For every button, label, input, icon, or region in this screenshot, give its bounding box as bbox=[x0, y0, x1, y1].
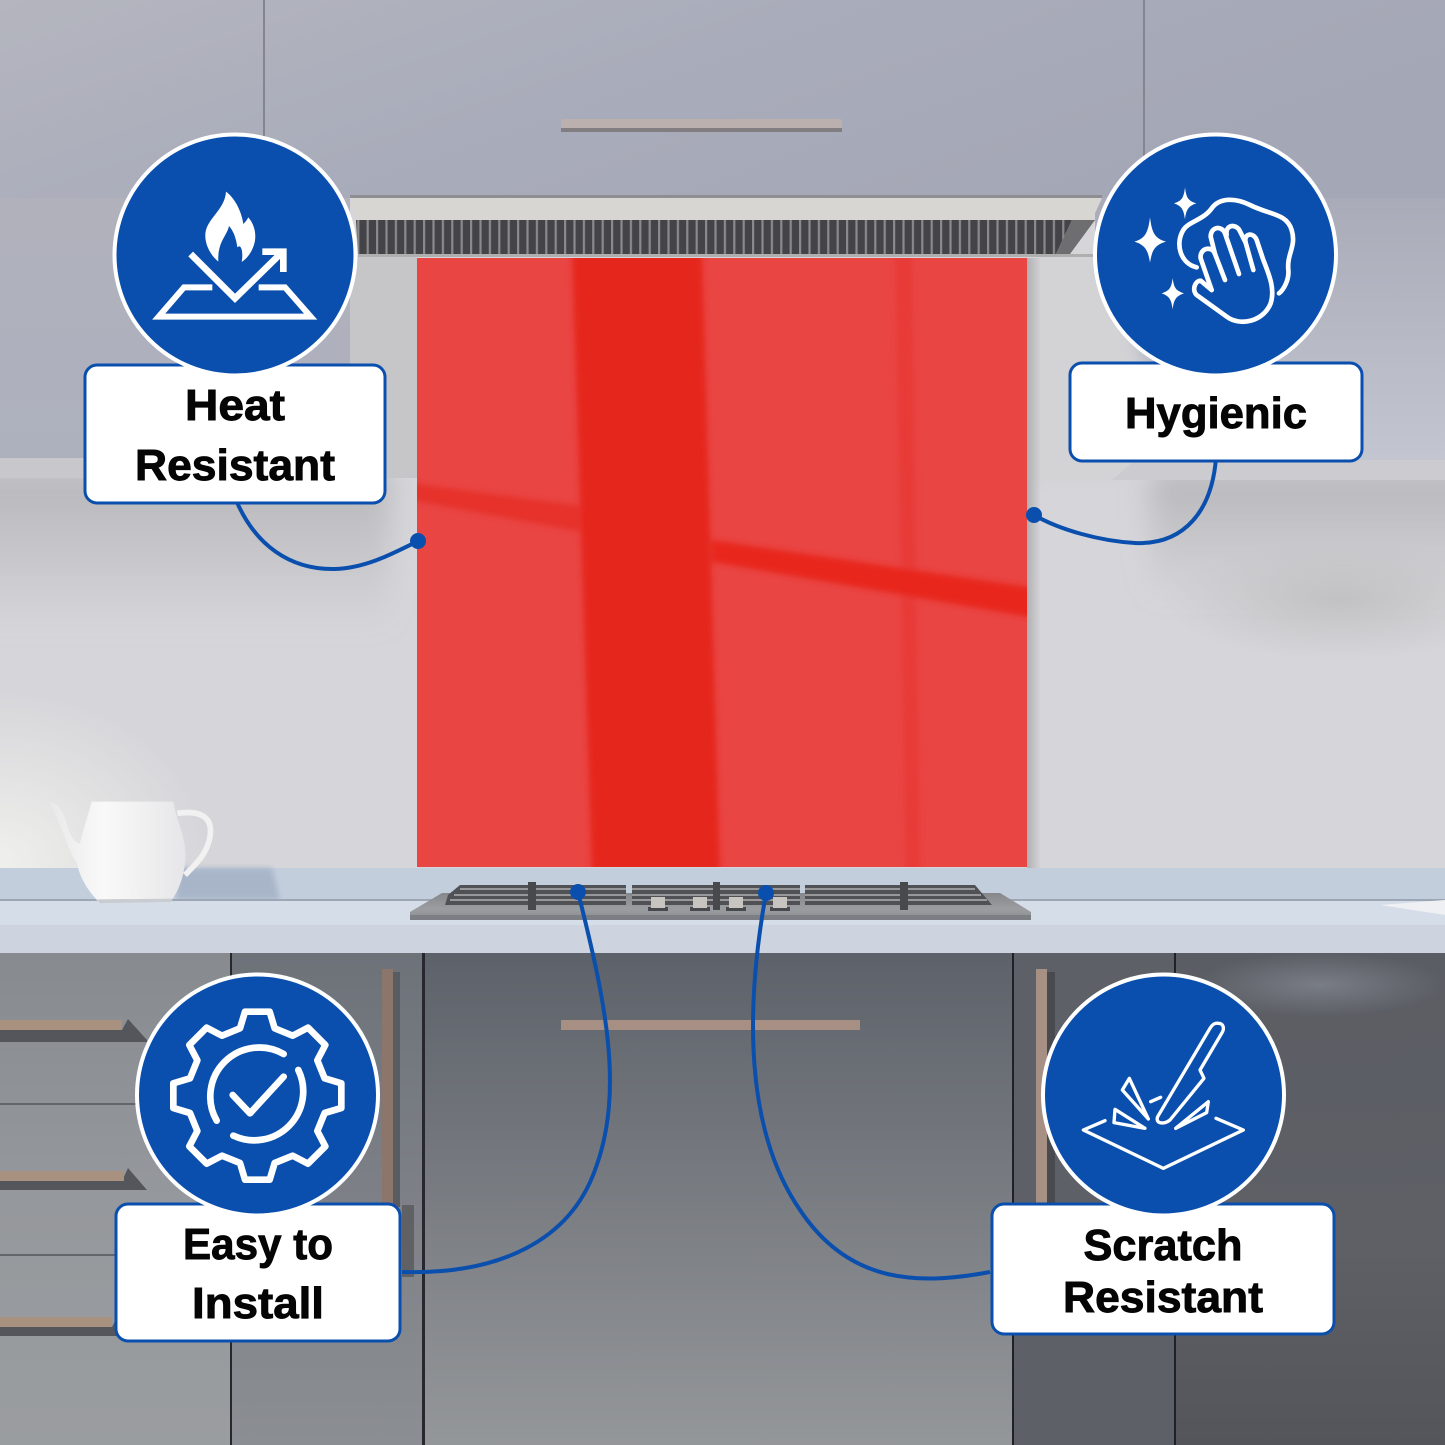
wall bbox=[0, 478, 1445, 868]
label box: easy to install bbox=[116, 1204, 400, 1341]
icon badge: scratch resistant bbox=[1043, 974, 1284, 1216]
icon badge: easy to install bbox=[137, 974, 378, 1216]
label box: heat resistant bbox=[85, 365, 385, 503]
upper cabinet handle bbox=[561, 119, 842, 132]
cabinet handles bbox=[0, 969, 1055, 1336]
label text: scratch resistant: Resistant bbox=[1063, 1273, 1263, 1322]
worktop bbox=[0, 868, 1445, 953]
label text: easy to install: Easy to bbox=[183, 1220, 333, 1269]
label text: heat resistant: Resistant bbox=[135, 441, 335, 490]
connector: hygienic bbox=[1026, 458, 1216, 543]
gas hob bbox=[410, 882, 1031, 920]
icon badge: hygienic bbox=[1095, 134, 1336, 376]
red glass splashback panel bbox=[410, 250, 1035, 875]
teapot bbox=[50, 802, 211, 903]
label box: scratch resistant bbox=[992, 1204, 1334, 1334]
label box: hygienic bbox=[1070, 363, 1362, 461]
label text: hygienic: Hygienic bbox=[1125, 389, 1307, 438]
panel shadow on wall bbox=[1027, 258, 1041, 868]
label text: scratch resistant: Scratch bbox=[1084, 1221, 1242, 1270]
lower cabinets bbox=[0, 953, 1445, 1445]
label text: heat resistant: Heat bbox=[185, 381, 285, 430]
label text: easy to install: Install bbox=[192, 1279, 324, 1328]
connector: scratch resistant bbox=[753, 885, 990, 1279]
connector: easy to install bbox=[402, 884, 610, 1272]
connector: heat resistant bbox=[236, 500, 426, 569]
icon badge: heat resistant bbox=[114, 134, 356, 376]
extractor hood bbox=[350, 195, 1102, 257]
upper cabinets bbox=[0, 0, 1445, 482]
